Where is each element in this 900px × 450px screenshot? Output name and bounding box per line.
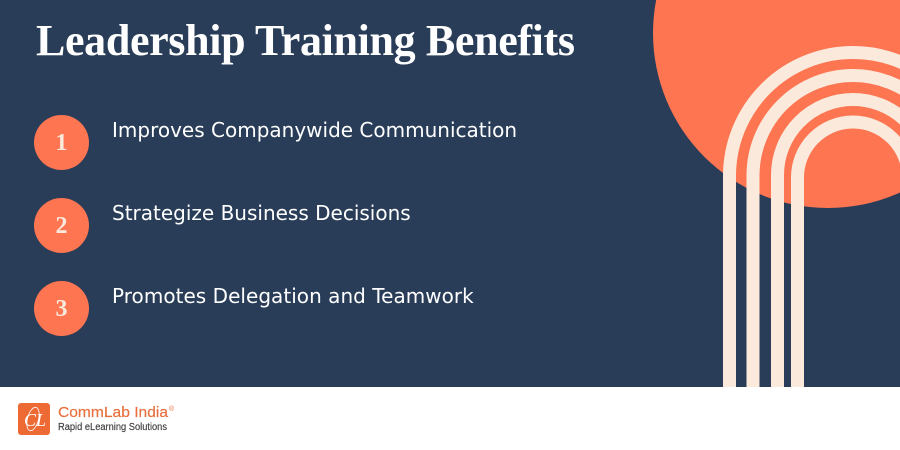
icon: logo square	[18, 403, 50, 435]
title: Leadership Training Benefits	[36, 16, 575, 65]
benefit 3 text: Promotes Delegation and Teamwork	[112, 284, 474, 308]
icon: logo square: CL	[24, 410, 46, 430]
number badge 1	[34, 115, 89, 170]
number badge 2	[34, 198, 89, 253]
logo name: CommLab India	[58, 404, 169, 421]
benefit 1 text: Improves Companywide Communication	[112, 118, 517, 142]
number badge 3	[34, 281, 89, 336]
logo tagline: Rapid eLearning Solutions	[58, 422, 167, 433]
number badge 3: 3	[56, 296, 68, 322]
logo: CommLab India	[18, 403, 175, 435]
number badge 2: 2	[56, 213, 68, 239]
number badge 1: 1	[56, 130, 68, 156]
registered mark: ®	[169, 405, 175, 413]
benefit 2 text: Strategize Business Decisions	[112, 201, 411, 225]
